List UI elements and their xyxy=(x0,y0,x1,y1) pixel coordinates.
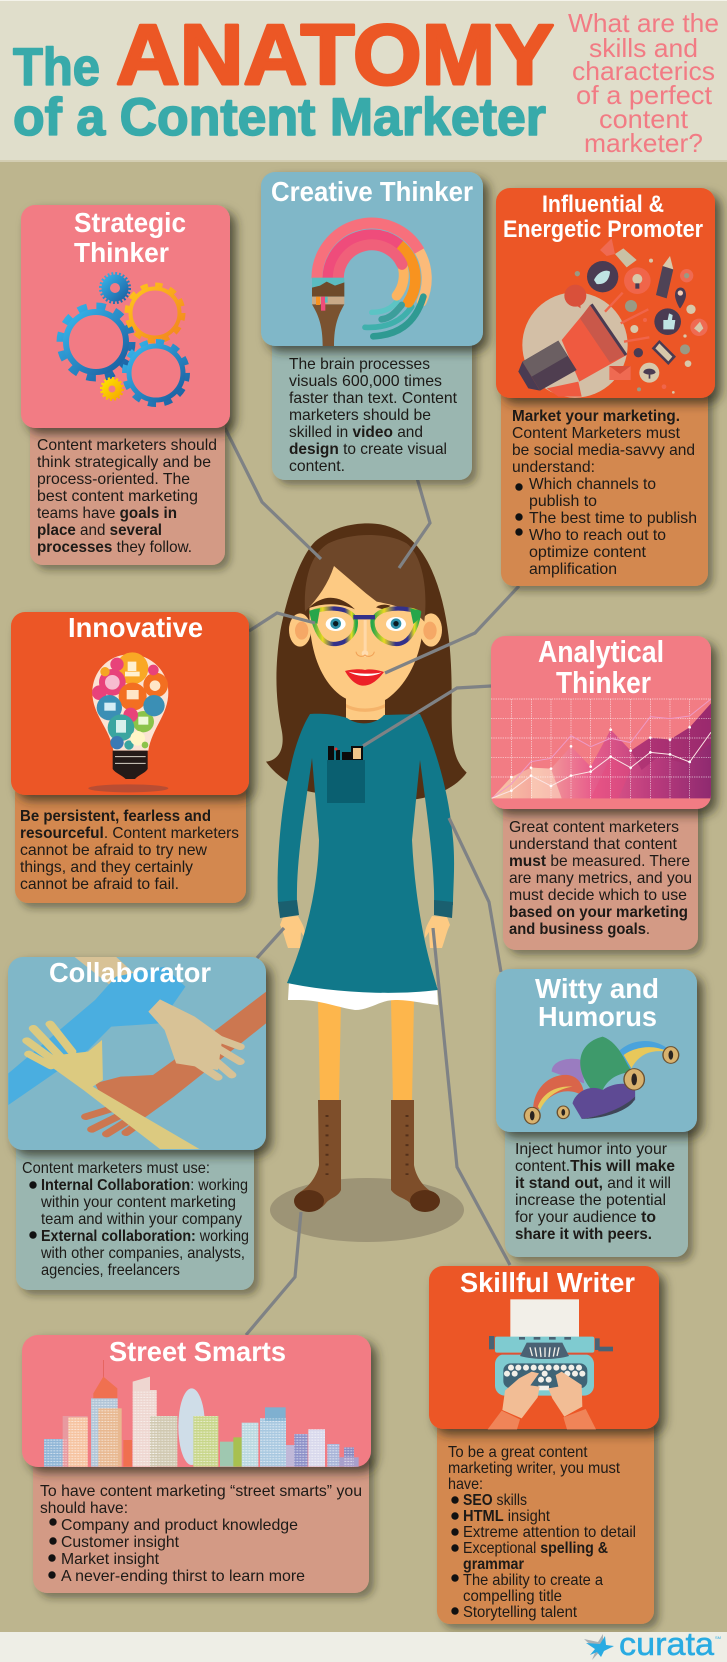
text card: compelling title xyxy=(463,1588,562,1605)
text card: Be persistent, fearless and xyxy=(20,808,211,825)
heading: Humorus xyxy=(538,1001,657,1032)
panel: creative thinker xyxy=(261,172,483,480)
text card: must decide which to use xyxy=(509,887,687,904)
subtitle question: content xyxy=(599,104,689,134)
pocket with pens xyxy=(327,746,365,803)
subtitle question: skills and xyxy=(589,33,698,63)
heading xyxy=(503,191,703,243)
legs xyxy=(318,1000,414,1102)
icon: typewriter and hands xyxy=(488,1299,613,1429)
text card: To have content marketing “street smarts” you xyxy=(40,1483,362,1500)
text card: understand that content xyxy=(509,836,678,853)
glasses xyxy=(312,609,419,644)
text card: The best time to publish xyxy=(529,510,697,527)
heading: Street Smarts xyxy=(109,1336,286,1367)
text card: resourceful. Content marketers xyxy=(20,825,239,842)
subtitle question: of a perfect xyxy=(576,80,713,110)
text card: design to create visual xyxy=(289,441,447,458)
text card: should have: xyxy=(40,1500,128,1517)
subtitle question xyxy=(568,8,719,158)
text card: content.This will make xyxy=(515,1158,675,1175)
text card: share it with peers. xyxy=(515,1226,652,1243)
eyebrows xyxy=(308,598,355,609)
text card xyxy=(503,795,698,950)
heading: Collaborator xyxy=(49,957,211,988)
text card xyxy=(33,1450,369,1593)
footer band xyxy=(0,1632,727,1662)
hands xyxy=(280,916,450,948)
icon: megaphone and social icons xyxy=(518,238,708,398)
header card xyxy=(261,172,483,346)
title xyxy=(13,8,554,147)
panel: collaborator xyxy=(8,957,266,1290)
heading: Strategic xyxy=(74,207,186,238)
text card: agencies, freelancers xyxy=(41,1262,180,1279)
text card xyxy=(505,1115,688,1257)
heading: Witty and xyxy=(535,973,659,1004)
text card: and business goals. xyxy=(509,921,650,938)
text card xyxy=(501,380,708,586)
subtitle question: What are the xyxy=(568,8,719,38)
text card: must be measured. There xyxy=(509,853,690,870)
white hem xyxy=(288,982,438,1010)
text card: grammar xyxy=(463,1556,524,1573)
hair back xyxy=(266,523,467,799)
ground shadow xyxy=(270,1178,464,1242)
heading: Analytical xyxy=(538,634,664,669)
subtitle question: marketer? xyxy=(584,128,703,158)
text card: understand: xyxy=(512,459,595,476)
text card: best content marketing xyxy=(37,488,198,505)
icon: jester hat xyxy=(524,1037,679,1124)
connector lines xyxy=(225,428,519,1335)
text card xyxy=(30,410,225,565)
text card: teams have goals in xyxy=(37,505,177,522)
text card: To be a great content xyxy=(448,1444,588,1461)
text card: Extreme attention to detail xyxy=(463,1524,636,1541)
icon: city skyline xyxy=(44,1360,359,1467)
text card: HTML insight xyxy=(463,1508,551,1525)
text card: SEO skills xyxy=(463,1492,527,1509)
text card: Exceptional spelling & xyxy=(463,1540,608,1557)
text card: place and several xyxy=(37,522,162,539)
text card: it stand out, and it will xyxy=(515,1175,671,1192)
text card: Which channels to xyxy=(529,476,656,493)
heading: Energetic Promoter xyxy=(503,216,703,243)
header card xyxy=(491,636,711,809)
boots xyxy=(294,1100,440,1212)
text card: publish to xyxy=(529,493,597,510)
header card xyxy=(496,969,697,1132)
cuffs xyxy=(278,900,453,918)
logo: curata xyxy=(584,1626,721,1662)
text card: amplification xyxy=(529,561,617,578)
text card: based on your marketing xyxy=(509,904,688,921)
icon: paint brush swirl xyxy=(312,223,427,346)
text card: Market your marketing. xyxy=(512,408,680,425)
text card: increase the potential xyxy=(515,1192,666,1209)
text card: Internal Collaboration: working xyxy=(41,1177,248,1194)
header card xyxy=(22,1335,371,1467)
nose xyxy=(364,620,367,650)
header card xyxy=(8,957,266,1150)
text card: External collaboration: working xyxy=(41,1228,249,1245)
text card: Customer insight xyxy=(61,1534,180,1551)
text card: Company and product knowledge xyxy=(61,1517,298,1534)
text card: Content marketers should xyxy=(37,437,217,454)
face xyxy=(309,563,423,704)
teal dress xyxy=(278,714,454,993)
text card xyxy=(272,330,472,480)
heading: Innovative xyxy=(68,612,203,643)
text card xyxy=(15,780,246,903)
icon: four clasped hands xyxy=(8,957,266,1149)
heading: Creative Thinker xyxy=(271,176,473,207)
text card: The brain processes xyxy=(289,356,430,373)
heading xyxy=(538,634,664,700)
character: content marketer xyxy=(266,523,467,1242)
logo: curata: curata xyxy=(619,1626,714,1662)
icon: gears xyxy=(60,274,187,404)
text card: think strategically and be xyxy=(37,454,211,471)
title: of a Content Marketer xyxy=(13,88,546,147)
text card: Great content marketers xyxy=(509,819,679,836)
eyes xyxy=(326,617,346,631)
text card: Market insight xyxy=(61,1551,160,1568)
text card: be social media-savvy and xyxy=(512,442,695,459)
lips xyxy=(345,669,384,686)
header band xyxy=(0,0,727,162)
heading: Influential & xyxy=(542,191,664,218)
text card: within your content marketing xyxy=(40,1194,236,1211)
text card: with other companies, analysts, xyxy=(40,1245,245,1262)
text card: things, and they certainly xyxy=(20,859,193,876)
text card: A never-ending thirst to learn more xyxy=(61,1568,305,1585)
text card: are many metrics, and you xyxy=(509,870,692,887)
panel: analytical thinker xyxy=(491,634,712,950)
header card xyxy=(21,205,230,428)
text card: Inject humor into your xyxy=(515,1141,668,1158)
panel: skillful writer xyxy=(429,1266,659,1624)
icon: line chart over mountains xyxy=(491,699,712,798)
text card: cannot be afraid to try new xyxy=(20,842,207,859)
header card xyxy=(11,612,249,795)
text card: marketing writer, you must xyxy=(448,1460,621,1477)
heading xyxy=(74,207,186,268)
title: The xyxy=(13,38,100,97)
text card: skilled in video and xyxy=(289,424,423,441)
icon: light bulb of media bubbles xyxy=(88,652,168,792)
text card: cannot be afraid to fail. xyxy=(20,876,179,893)
text card: Who to reach out to xyxy=(529,527,666,544)
title: ANATOMY xyxy=(116,8,554,103)
heading xyxy=(535,973,659,1032)
text card: visuals 600,000 times xyxy=(289,373,442,390)
heading: Thinker xyxy=(74,237,169,268)
text card: have: xyxy=(448,1476,483,1493)
heading: Thinker xyxy=(556,665,651,700)
logo: curata: SM xyxy=(715,1635,721,1640)
heading: Skillful Writer xyxy=(460,1267,635,1298)
text card: process-oriented. The xyxy=(37,471,190,488)
panel: street smarts xyxy=(22,1335,371,1593)
text card: marketers should be xyxy=(289,407,431,424)
text card: team and within your company xyxy=(41,1211,242,1228)
text card: Content Marketers must xyxy=(512,425,681,442)
text card: The ability to create a xyxy=(463,1572,603,1589)
text card: Content marketers must use: xyxy=(22,1160,210,1177)
panel: strategic thinker xyxy=(21,205,230,565)
bangs xyxy=(305,535,425,622)
text card: content. xyxy=(289,458,345,475)
panel: witty and humorous xyxy=(496,969,697,1257)
text card xyxy=(16,1135,254,1290)
text card: optimize content xyxy=(529,544,647,561)
panel: innovative xyxy=(11,612,249,903)
panel: influential and energetic promoter xyxy=(496,188,715,586)
subtitle question: characterics xyxy=(572,56,715,86)
header card xyxy=(429,1266,659,1429)
text card xyxy=(437,1415,654,1624)
text card: Storytelling talent xyxy=(463,1604,578,1621)
text card: processes they follow. xyxy=(37,539,192,556)
text card: for your audience to xyxy=(515,1209,656,1226)
header card xyxy=(496,188,715,398)
text card: faster than text. Content xyxy=(289,390,458,407)
